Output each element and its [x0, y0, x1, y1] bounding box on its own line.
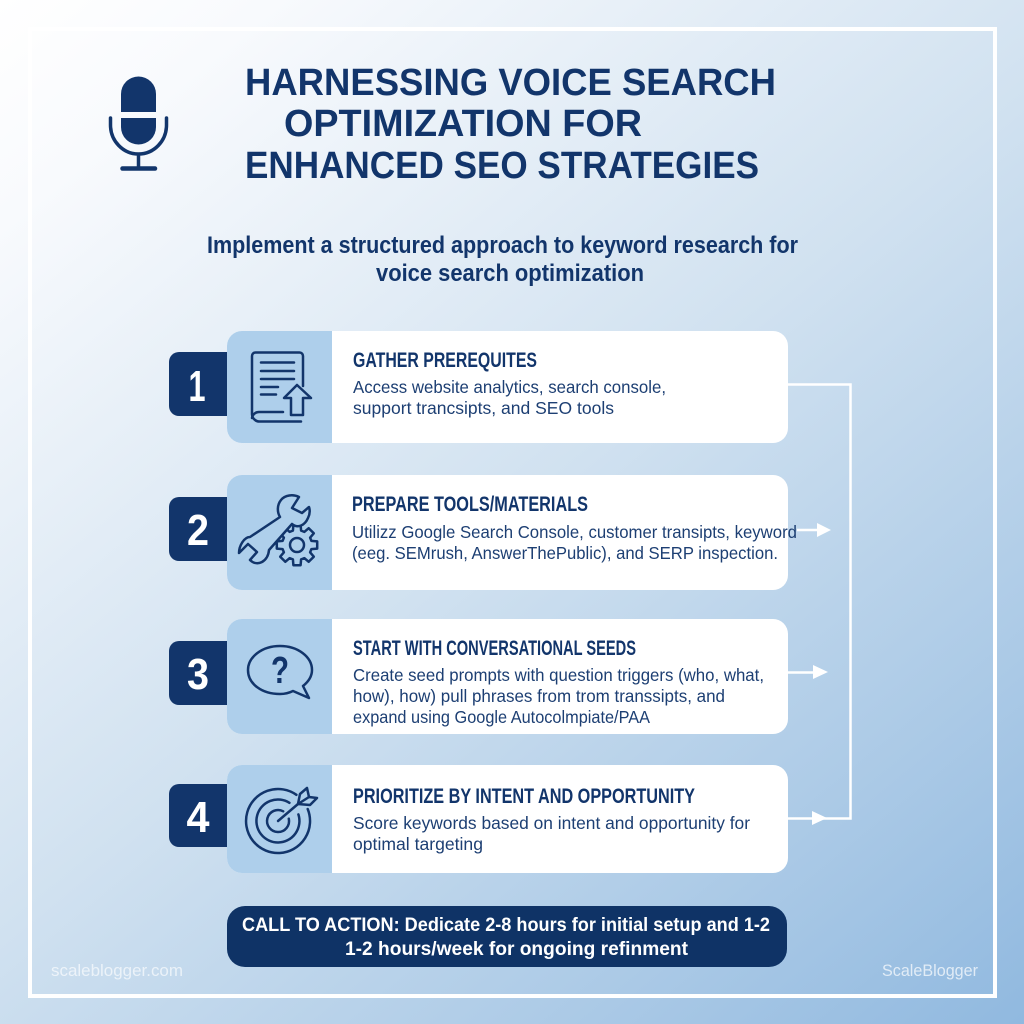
- title: OPTIMIZATION FOR: [284, 103, 642, 145]
- number badge 2: [169, 497, 227, 561]
- icon: question speech bubble: ?: [271, 650, 289, 692]
- step 4: [169, 765, 788, 873]
- icon panel 3: [227, 619, 332, 734]
- number badge 4: [169, 784, 227, 847]
- card 2 text: [352, 493, 797, 563]
- card 3 text: START WITH CONVERSATIONAL SEEDS: [353, 637, 636, 660]
- number badge 4: 4: [186, 793, 210, 842]
- card 4 panel: [227, 765, 788, 873]
- card 4 text: PRIORITIZE BY INTENT AND OPPORTUNITY: [353, 785, 695, 808]
- card 4 text: [353, 785, 750, 854]
- call to action: 1-2 hours/week for ongoing refinment: [345, 938, 688, 960]
- icon: question speech bubble: [248, 646, 312, 698]
- card 4 text: Score keywords based on intent and opportunity for: [353, 813, 750, 833]
- card 3 text: how), how) pull phrases from trom transsipts, and: [353, 686, 725, 706]
- card 1 text: Access website analytics, search console,: [353, 377, 666, 397]
- icon: wrench and gear: [239, 495, 317, 565]
- step 1: [169, 331, 788, 443]
- card 2 text: PREPARE TOOLS/MATERIALS: [352, 493, 588, 516]
- title: HARNESSING VOICE SEARCH: [245, 62, 776, 104]
- subtitle: [207, 232, 798, 287]
- card 1 text: GATHER PREREQUITES: [353, 349, 537, 372]
- icon: microphone: [110, 76, 166, 168]
- subtitle: voice search optimization: [376, 260, 644, 287]
- card 3 text: [353, 637, 764, 727]
- icon panel 4: [227, 765, 332, 873]
- title: ENHANCED SEO STRATEGIES: [245, 145, 759, 187]
- icon: document upload: [252, 352, 311, 422]
- card 1 panel: [227, 331, 788, 443]
- number badge 2: 2: [187, 506, 209, 555]
- step 2: [169, 475, 797, 590]
- card 3 text: Create seed prompts with question triggers (who, what,: [353, 665, 764, 685]
- step 3: [169, 619, 788, 734]
- card 1 text: support trancsipts, and SEO tools: [353, 398, 614, 418]
- connector arrows: [788, 384, 850, 825]
- number badge 1: [169, 352, 227, 416]
- card 2 panel: [227, 475, 788, 590]
- footer right: ScaleBlogger: [882, 961, 978, 980]
- icon panel 2: [227, 475, 332, 590]
- icon: target with arrow: [246, 788, 317, 853]
- call to action: CALL TO ACTION: Dedicate 2-8 hours for initial setup and 1-2: [242, 914, 770, 936]
- number badge 1: 1: [188, 362, 206, 411]
- subtitle: Implement a structured approach to keyword research for: [207, 232, 798, 259]
- footer left: scaleblogger.com: [51, 961, 183, 980]
- card 3 text: expand using Google Autocolmpiate/PAA: [353, 707, 650, 727]
- number badge 3: [169, 641, 227, 705]
- card 4 text: optimal targeting: [353, 834, 483, 854]
- number badge 3: 3: [187, 650, 209, 699]
- card 3 panel: [227, 619, 788, 734]
- card 1 text: [353, 349, 666, 418]
- card 2 text: Utilizz Google Search Console, customer transipts, keyword: [352, 522, 797, 542]
- icon panel 1: [227, 331, 332, 443]
- title: [245, 62, 776, 187]
- call to action: [227, 906, 787, 967]
- card 2 text: (eeg. SEMrush, AnswerThePublic), and SERP inspection.: [352, 543, 778, 563]
